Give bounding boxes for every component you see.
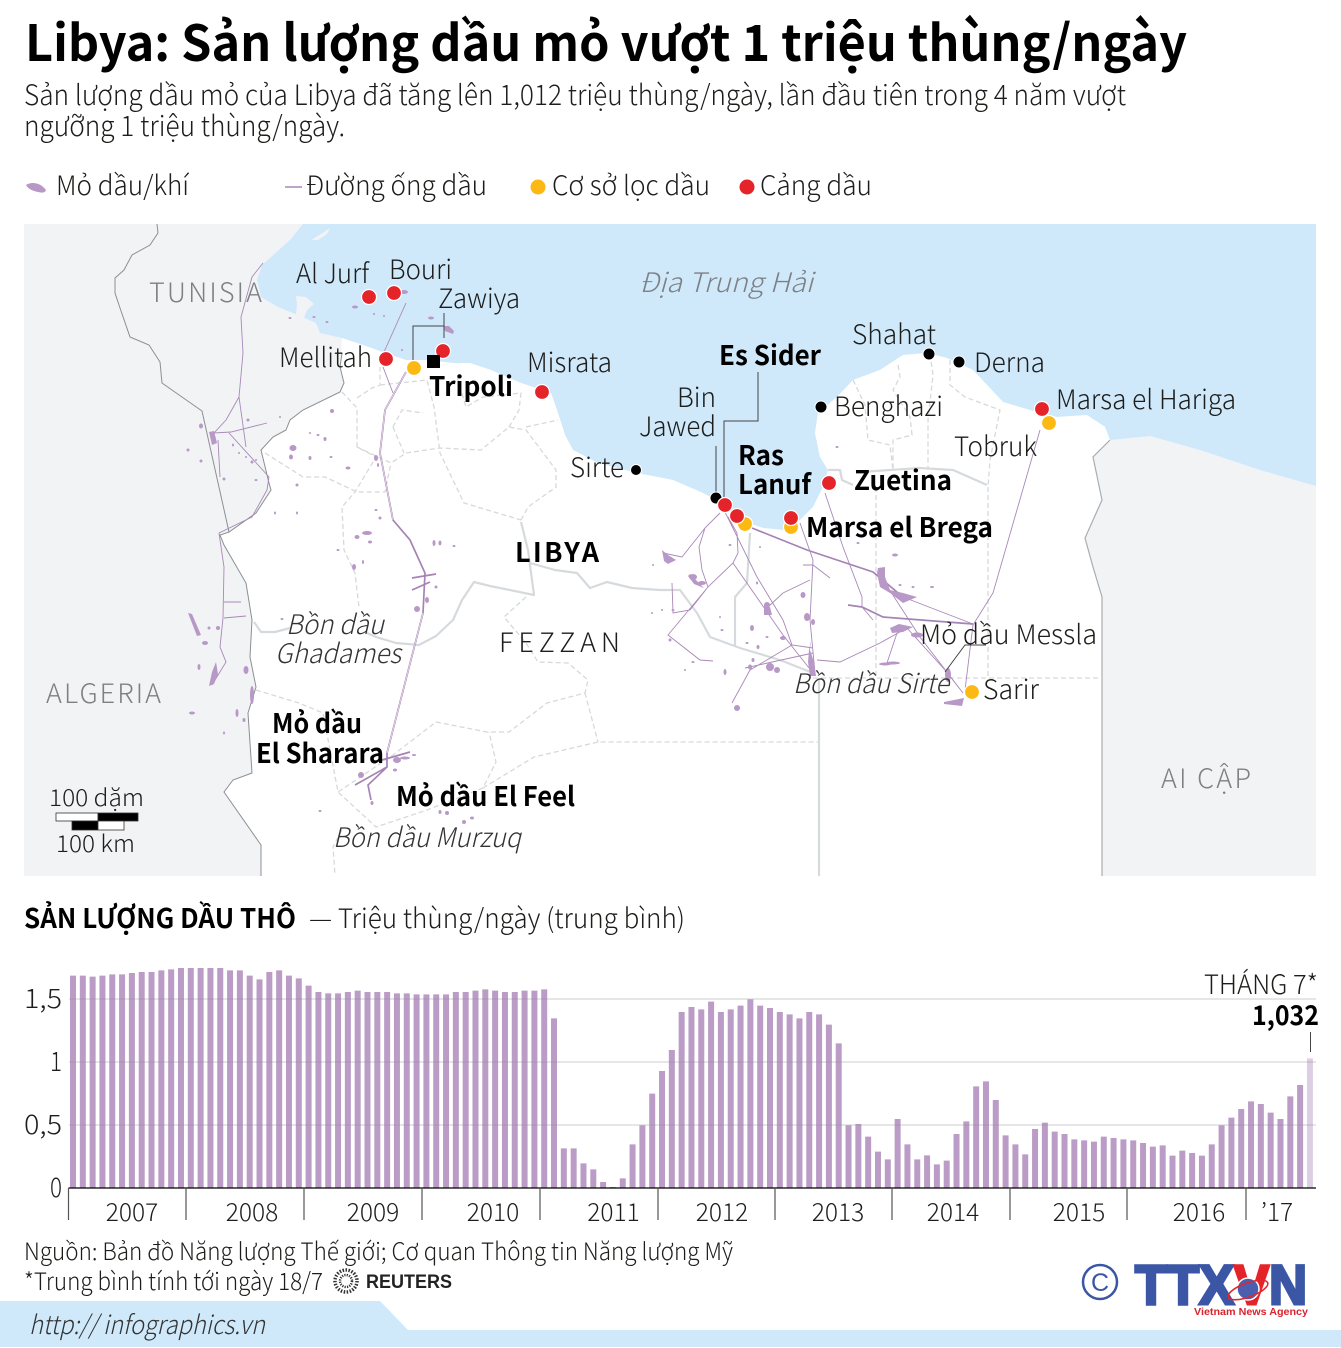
map labels: FEZZAN: [499, 621, 620, 660]
source note: Nguồn: Bản đồ Năng lượng Thế giới; Cơ quan Thông tin Năng lượng Mỹ: [24, 1232, 733, 1267]
x axis: 2009: [347, 1194, 399, 1229]
place markers: [362, 286, 1056, 700]
map labels: AI CẬP: [1161, 757, 1251, 796]
map labels: Địa Trung Hải: [639, 261, 816, 300]
x axis: 2015: [1053, 1194, 1105, 1229]
map labels: Tripoli: [429, 365, 513, 404]
chart heading: [24, 897, 685, 936]
map labels: Bin: [677, 376, 716, 415]
source note: [24, 1232, 733, 1297]
title: Libya: Sản lượng dầu mỏ vượt 1 triệu thùng/ngày: [25, 4, 1187, 76]
footer band: http:// infographics.vn: [29, 1305, 266, 1342]
marker: Es Sider: [718, 498, 732, 512]
map labels: Sirte: [570, 446, 624, 485]
map labels: Bouri: [389, 248, 452, 287]
marker: Misrata: [534, 384, 550, 400]
y axis labels: 0: [50, 1166, 62, 1205]
callout: July value: 1,032: [1252, 994, 1319, 1033]
map labels: Tobruk: [954, 425, 1037, 464]
legend: [26, 164, 872, 203]
map labels: El Sharara: [256, 732, 384, 771]
islands: [296, 228, 330, 318]
x axis: 2007: [106, 1194, 158, 1229]
x axis: [68, 1188, 1316, 1229]
map labels: Zawiya: [438, 277, 520, 316]
marker: Benghazi: [815, 401, 827, 413]
subtitle: [24, 74, 1126, 145]
y axis labels: 1: [50, 1040, 62, 1079]
marker: Zawiya: [436, 344, 450, 358]
map labels: Ras: [738, 434, 784, 473]
TTXVN logo: Vietnam News Agency: [1194, 1306, 1308, 1318]
map labels: [46, 248, 1251, 855]
map labels: Derna: [974, 341, 1045, 380]
Libya land: [220, 338, 1110, 876]
map labels: Es Sider: [719, 334, 821, 373]
map labels: Benghazi: [834, 385, 943, 424]
legend: oil pipeline: Đường ống dầu: [306, 164, 487, 203]
marker: Bin Jawed: [710, 492, 722, 504]
marker: Ras Lanuf refinery: [738, 516, 752, 532]
map panel: [24, 224, 1316, 876]
map labels: Sarir: [983, 668, 1039, 707]
pipelines: [212, 263, 1040, 800]
marker: Zawiya refinery: [406, 360, 422, 376]
y axis labels: 1,5: [24, 977, 62, 1016]
monthly bars: [70, 968, 1313, 1188]
map labels: Jawed: [639, 405, 716, 444]
legend: oil and gas field: Mỏ dầu/khí: [56, 164, 190, 203]
marker: Al Jurf: [362, 290, 376, 304]
marker: Zuetina: [822, 476, 836, 490]
map labels: Mỏ dầu: [272, 702, 362, 741]
x axis: ’17: [1261, 1194, 1293, 1229]
country borders: [115, 224, 344, 876]
chart heading: SẢN LƯỢNG DẦU THÔ: [24, 897, 296, 936]
x axis: 2013: [812, 1194, 864, 1229]
y axis labels: 0,5: [24, 1103, 62, 1142]
legend: refinery: Cơ sở lọc dầu: [552, 164, 710, 203]
map labels: Marsa el Hariga: [1056, 378, 1236, 417]
oil fields: [186, 290, 964, 824]
map labels: Marsa el Brega: [806, 506, 993, 545]
footer band: [0, 1301, 1341, 1347]
marker: Bouri: [386, 286, 402, 300]
marker: Derna: [953, 356, 965, 368]
y axis labels: [24, 977, 62, 1205]
map labels: LIBYA: [515, 531, 600, 570]
x axis: 2008: [226, 1194, 278, 1229]
map labels: Lanuf: [738, 463, 812, 502]
map labels: Al Jurf: [296, 252, 370, 291]
map background land: [24, 224, 1316, 876]
x axis: 2010: [467, 1194, 519, 1229]
copyright symbol: C: [1091, 1269, 1109, 1297]
subtitle: ngưỡng 1 triệu thùng/ngày.: [24, 105, 345, 145]
map labels: Shahat: [852, 313, 936, 352]
marker: Sarir: [964, 684, 980, 700]
x axis: 2012: [696, 1194, 748, 1229]
map labels: Bồn dầu Murzuq: [333, 816, 523, 855]
callout: July value: THÁNG 7*: [1204, 963, 1318, 1002]
chart heading: — Triệu thùng/ngày (trung bình): [309, 897, 685, 936]
marker: Tripoli capital: [427, 355, 440, 368]
scale bar: 100 km: [56, 825, 135, 859]
Reuters logo: [335, 1270, 452, 1293]
map labels: ALGERIA: [46, 672, 161, 711]
Mediterranean sea: [257, 224, 1316, 530]
scale bar: [49, 779, 144, 859]
map labels: Mỏ dầu El Feel: [396, 775, 575, 814]
marker: Ras Lanuf: [730, 508, 744, 524]
TTXVN logo: TTXVN: [1135, 1253, 1307, 1316]
map labels: Bồn dầu: [286, 603, 385, 642]
Reuters logo: REUTERS: [366, 1272, 452, 1293]
subtitle: Sản lượng dầu mỏ của Libya đã tăng lên 1,012 triệu thùng/ngày, lần đầu tiên trong 4 năm vượt: [24, 74, 1126, 114]
bar chart: [24, 963, 1319, 1229]
x axis: 2016: [1173, 1194, 1225, 1229]
map labels: Bồn dầu Sirte: [793, 662, 951, 701]
marker: Marsa el Hariga refinery: [1042, 416, 1056, 430]
marker: Marsa el Brega: [784, 510, 798, 526]
marker: Marsa el Brega refinery: [784, 520, 798, 534]
scale bar: 100 dặm: [49, 779, 144, 813]
map labels: Mellitah: [279, 336, 372, 375]
map labels: Misrata: [527, 341, 612, 380]
legend: oil port: Cảng dầu: [760, 164, 872, 203]
x axis: 2011: [587, 1194, 640, 1229]
x axis: 2014: [927, 1194, 979, 1229]
globe: [1226, 1276, 1270, 1304]
marker: Marsa el Hariga: [1034, 402, 1050, 416]
source note: *Trung bình tính tới ngày 18/7: [24, 1262, 323, 1297]
marker: Sirte: [630, 464, 642, 476]
map labels: Zuetina: [854, 459, 952, 498]
map labels: Mỏ dầu Messla: [920, 613, 1097, 652]
marker: Mellitah: [378, 352, 394, 366]
callout: July value: [1204, 963, 1319, 1052]
internal boundaries: [254, 354, 1102, 876]
leader lines: [413, 313, 986, 672]
map labels: TUNISIA: [149, 271, 262, 310]
copyright symbol: [1083, 1265, 1117, 1299]
map labels: Ghadames: [275, 632, 403, 671]
marker: Shahat: [923, 348, 935, 360]
